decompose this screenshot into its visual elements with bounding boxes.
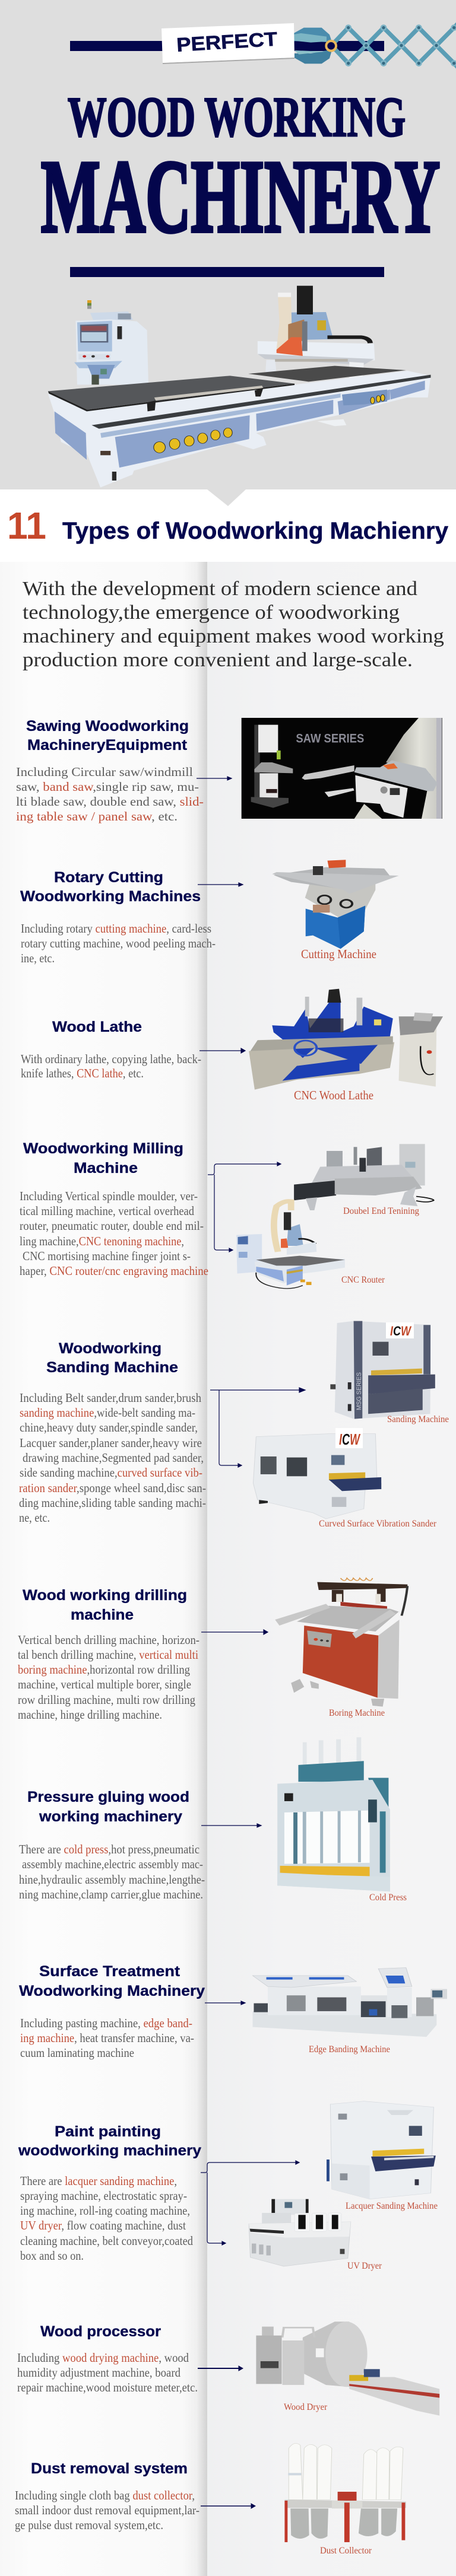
heading: Woodworking Machines <box>20 888 201 905</box>
description: knife lathes, CNC lathe, etc. <box>21 1066 144 1080</box>
heading: Paint painting <box>55 2123 161 2140</box>
description <box>21 921 216 965</box>
description: saw, band saw ,single rip saw, mu- <box>16 780 199 794</box>
heading: Woodworking Milling <box>23 1140 183 1157</box>
description: Including wood drying machine, wood <box>17 2351 189 2365</box>
panel: wood processor <box>17 2321 439 2416</box>
intro text: machinery and equipment makes wood working <box>23 625 444 647</box>
panel: folded page background <box>0 562 456 2576</box>
panel: surface treatment <box>19 1963 447 2060</box>
description: ine, etc. <box>21 951 55 965</box>
yellow clamps <box>154 395 385 453</box>
description <box>17 2351 198 2394</box>
control cabinet <box>74 300 148 384</box>
description: cleaning machine, belt conveyor,coated <box>20 2234 193 2248</box>
description: CNC mortising machine finger joint s- <box>23 1249 191 1263</box>
hero machine: CNC router <box>48 286 430 488</box>
image: saw series <box>242 718 442 819</box>
heading: Dust removal system <box>31 2460 188 2477</box>
description <box>19 1842 205 1901</box>
image: wood dryer <box>256 2321 439 2416</box>
image: boring machine <box>275 1578 407 1707</box>
description: Including pasting machine, edge band- <box>20 2016 192 2030</box>
description: row drilling machine, multi row drilling <box>18 1693 195 1707</box>
arrow <box>198 883 243 886</box>
description: machine, hinge drilling machine. <box>18 1707 162 1722</box>
pointer triangle <box>207 489 246 506</box>
description: Including Vertical spindle moulder, ver- <box>20 1189 198 1203</box>
description: Including single cloth bag dust collector, <box>15 2488 195 2502</box>
intro text: technology,the emergence of woodworking <box>23 602 400 624</box>
description: rotary cutting machine, wood peeling mach- <box>21 936 216 950</box>
heading <box>18 2123 201 2159</box>
image: edge banding machine <box>252 1968 447 2037</box>
panel: paint painting <box>18 2101 438 2271</box>
caption: Wood Dryer <box>284 2402 328 2412</box>
description: tical milling machine, vertical overhead <box>20 1204 194 1218</box>
arrow <box>200 1048 245 1053</box>
description: Including Belt sander,drum sander,brush <box>20 1391 201 1405</box>
panel: wood lathe <box>21 989 443 1102</box>
description: Including rotary cutting machine, card-less <box>21 921 211 936</box>
image: cutting machine <box>272 860 399 949</box>
caption: Lacquer Sanding Machine <box>346 2201 438 2211</box>
image: CNC lathe <box>249 989 443 1090</box>
heading <box>23 1140 183 1176</box>
heading: 11 Types of Woodworking Machienry: 11 <box>7 504 46 547</box>
description: ing machine, heat transfer machine, va- <box>20 2031 194 2045</box>
caption: Boring Machine <box>329 1708 385 1718</box>
caption: Cutting Machine <box>301 947 376 961</box>
description: box and so on. <box>20 2249 84 2263</box>
image: CNC router <box>236 1201 345 1289</box>
description: There are lacquer sanding machine, <box>20 2174 177 2188</box>
panel: milling machine <box>20 1140 433 1289</box>
description: Vertical bench drilling machine, horizon- <box>18 1633 200 1647</box>
panel: dust removal <box>15 2443 406 2556</box>
description <box>18 1633 200 1722</box>
image: UV dryer <box>249 2199 351 2266</box>
panel: sawing machinery <box>16 718 442 823</box>
heading: woodworking machinery <box>18 2142 201 2159</box>
heading: Woodworking Machinery <box>19 1983 205 1999</box>
description <box>16 765 204 823</box>
heading: Machine <box>74 1160 138 1176</box>
caption: Curved Surface Vibration Sander <box>319 1519 437 1529</box>
panel: drilling machine <box>18 1578 407 1722</box>
panel: sanding machine <box>19 1321 449 1529</box>
panel: rotary cutting <box>20 860 399 965</box>
description: side sanding machine,curved surface vib- <box>20 1465 202 1480</box>
logo: ICW: ICW <box>339 1430 361 1448</box>
description <box>20 1189 208 1278</box>
heading: machine <box>71 1607 134 1623</box>
image: saw series: SAW SERIES <box>296 732 364 746</box>
description: ning machine,clamp carrier,glue machine. <box>19 1887 203 1901</box>
heading <box>27 1789 189 1825</box>
machine series label: MSG SERIES <box>356 1372 363 1410</box>
heading: Wood working drilling <box>23 1587 187 1604</box>
image: cold press <box>277 1737 390 1891</box>
bracket arrow <box>210 1388 305 1467</box>
heading <box>23 1587 187 1623</box>
arrow <box>205 2001 245 2005</box>
description: cuum laminating machine <box>20 2046 134 2060</box>
description: UV dryer, flow coating machine, dust <box>20 2218 186 2232</box>
description: repair machine,wood moisture meter,etc. <box>17 2380 198 2394</box>
description: Including Circular saw/windmill <box>16 765 193 779</box>
image: sanding machine <box>330 1321 435 1419</box>
heading: Rotary Cutting <box>54 869 163 886</box>
bracket arrow <box>208 1162 281 1252</box>
description: machine, vertical multiple borer, single <box>18 1677 191 1691</box>
arrow <box>201 1630 268 1634</box>
bracket arrow <box>201 2161 299 2245</box>
caption: UV Dryer <box>347 2261 382 2271</box>
description: small indoor dust removal equipment,lar- <box>15 2503 200 2517</box>
description: boring machine,horizontal row drilling <box>18 1662 190 1677</box>
image: double end tenoning <box>294 1144 433 1210</box>
image: lacquer sanding machine <box>327 2101 436 2199</box>
description: ding machine,sliding table sanding machi- <box>19 1496 206 1510</box>
heading <box>26 718 189 753</box>
image: dust collector <box>284 2443 406 2542</box>
description: ration sander,sponge wheel sand,disc san- <box>19 1481 206 1495</box>
description <box>15 2488 200 2532</box>
logo: ICW: ICW <box>390 1324 412 1338</box>
image: curved surface sander <box>253 1434 381 1519</box>
tables <box>48 366 406 411</box>
gantry and spindle <box>258 286 375 390</box>
caption: Cold Press <box>369 1893 407 1903</box>
caption: CNC Router <box>341 1275 385 1285</box>
heading: working machinery <box>39 1808 182 1825</box>
divider bar <box>70 267 384 277</box>
description <box>20 2174 193 2263</box>
heading: Surface Treatment <box>39 1963 180 1980</box>
caption: Edge Banding Machine <box>309 2044 390 2055</box>
intro text <box>23 578 444 671</box>
description: spraying machine, electrostatic spray- <box>20 2189 187 2203</box>
heading <box>20 869 201 905</box>
description <box>21 1052 201 1080</box>
machine bed body <box>48 371 430 488</box>
title <box>41 85 440 254</box>
intro text: With the development of modern science and <box>23 578 417 600</box>
description: There are cold press,hot press,pneumatic <box>19 1842 200 1856</box>
description: router, pneumatic router, double end mil- <box>20 1219 204 1233</box>
description: assembly machine,electric assembly mac- <box>22 1857 203 1871</box>
heading: Woodworking <box>59 1340 162 1357</box>
heading: Sanding Machine <box>46 1359 178 1376</box>
heading: Wood Lathe <box>52 1019 142 1035</box>
description: Lacquer sander,planer sander,heavy wire <box>20 1436 202 1450</box>
caption: Dust Collector <box>320 2546 372 2556</box>
heading: MachineryEquipment <box>27 737 188 753</box>
arrow <box>198 2366 243 2371</box>
description: hine,hydraulic assembly machine,lengthe- <box>19 1872 205 1887</box>
description: chine,heavy duty sander,spindle sander, <box>20 1420 198 1435</box>
heading: Wood processor <box>40 2323 161 2340</box>
arrow <box>201 2504 255 2508</box>
description: haper, CNC router/cnc engraving machine <box>20 1264 208 1278</box>
description: drawing machine,Segmented pad sander, <box>23 1451 204 1465</box>
description: ing machine, roll-ing coating machine, <box>20 2203 190 2218</box>
tag: PERFECT: PERFECT <box>176 28 278 56</box>
description <box>20 2016 194 2060</box>
caption: Sanding Machine <box>387 1414 449 1424</box>
panel: pressure gluing <box>19 1737 407 1903</box>
heading: 11 Types of Woodworking Machienry <box>7 504 449 547</box>
description: ne, etc. <box>19 1510 50 1525</box>
panel: hero background <box>0 0 456 489</box>
description: ing table saw / panel saw , etc. <box>16 809 178 823</box>
tag: PERFECT <box>162 23 294 64</box>
description <box>19 1391 206 1525</box>
caption: CNC Wood Lathe <box>294 1088 373 1102</box>
heading <box>19 1963 205 1999</box>
description: lti blade saw, double end saw, slid- <box>16 794 204 809</box>
description: sanding machine,wide-belt sanding ma- <box>20 1405 195 1420</box>
heading: 11 Types of Woodworking Machienry: Types of Woodworking Machienry <box>62 518 449 544</box>
description: With ordinary lathe, copying lathe, back- <box>21 1052 201 1066</box>
heading: Pressure gluing wood <box>27 1789 189 1805</box>
intro text: production more convenient and large-scale. <box>23 649 413 671</box>
arrow <box>197 777 232 780</box>
description: ling machine,CNC tenoning machine, <box>20 1234 184 1248</box>
description: tal bench drilling machine, vertical multi <box>18 1648 198 1662</box>
description: humidity adjustment machine, board <box>17 2365 180 2380</box>
caption: Doubel End Tenining <box>343 1206 419 1216</box>
description: ge pulse dust removal system,etc. <box>15 2518 163 2532</box>
panel: white heading band <box>0 489 456 562</box>
heading: Sawing Woodworking <box>26 718 189 734</box>
top bar with PERFECT tag <box>70 18 456 73</box>
arrow <box>201 1824 261 1827</box>
icon: mechanical claw arm <box>279 18 456 73</box>
heading <box>46 1340 178 1376</box>
